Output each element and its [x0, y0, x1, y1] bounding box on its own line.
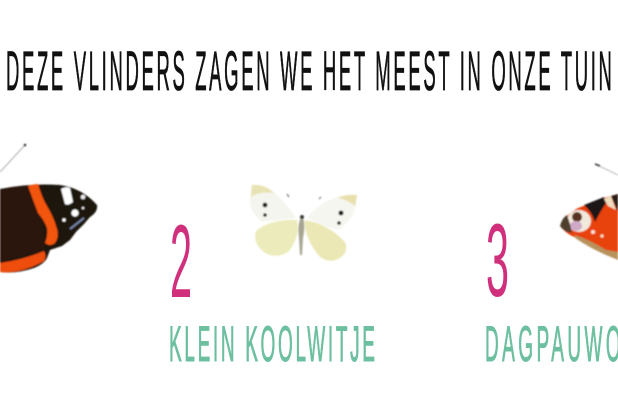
orange band	[28, 184, 58, 245]
label: klein koolwitje: KLEIN KOOLWITJE	[169, 317, 375, 373]
body	[298, 216, 304, 255]
title: DEZE VLINDERS ZAGEN WE HET MEEST IN ONZE TUIN	[6, 39, 612, 102]
butterfly 2: small white	[250, 185, 357, 261]
infographic canvas: 2	[170, 204, 192, 320]
wing spots	[263, 203, 267, 207]
fore wings	[250, 185, 296, 222]
butterfly 3: peacock	[560, 164, 618, 260]
antenna	[595, 164, 618, 175]
wing	[0, 184, 97, 272]
hind wings	[255, 220, 298, 256]
wing tips	[251, 185, 274, 197]
eye spot	[567, 210, 591, 232]
orange lower border	[0, 251, 46, 272]
brown edge	[575, 235, 618, 260]
butterfly 1: red admiral	[0, 144, 97, 272]
wing	[560, 194, 618, 258]
antenna	[0, 145, 25, 172]
dark band	[584, 197, 606, 222]
white spots	[61, 187, 73, 205]
infographic canvas: 3	[486, 203, 509, 319]
antennae	[287, 194, 321, 199]
